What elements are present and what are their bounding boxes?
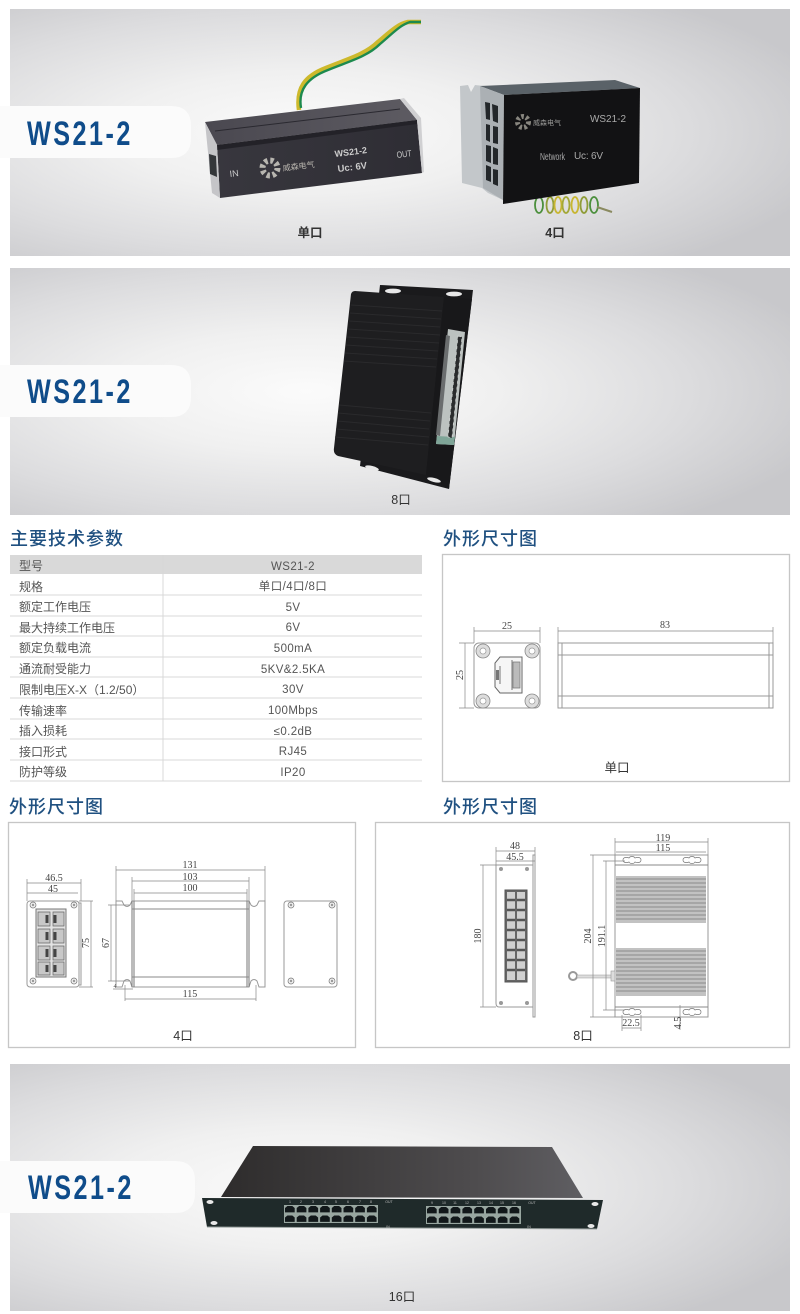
table row: specification: 单口/4口/8口 (259, 580, 327, 593)
table row: insertion loss: 插入损耗 (19, 724, 67, 738)
drawing: 4-port side view: 103 (182, 872, 198, 883)
heading: main technical parameters: 主要技术参数 (10, 529, 124, 549)
table row: rated working voltage: 5V (286, 602, 300, 614)
port labels: 16 (512, 1201, 516, 1205)
drawing: 8-port front view: 45.5 (506, 852, 524, 863)
drawing: 8-port top view: 4.5 (673, 1017, 684, 1029)
table row: rated load current: 500mA (274, 643, 312, 655)
label pill: WS21-2: WS21-2 (27, 373, 133, 411)
drawing: 4-port front view: 46.5 (45, 873, 63, 884)
table row: model: 型号 (19, 559, 43, 573)
product: 16-port rack surge protector (202, 1146, 603, 1229)
panel: 8-port dimension drawing (376, 822, 790, 1048)
drawing: 8-port top view: 119 (656, 833, 670, 844)
drawing: 8-port front view: 48 (510, 841, 520, 852)
table row: insertion loss (19, 724, 312, 738)
port labels: 4 (324, 1200, 326, 1204)
port labels: IN (386, 1225, 390, 1229)
caption: 16 ports: 16口 (389, 1290, 415, 1304)
drawing: front view: 25 (502, 621, 512, 632)
table row: model (19, 559, 315, 573)
drawing: 8-port top view (569, 833, 708, 1031)
table row: protection class: 防护等级 (19, 764, 67, 779)
product: single port surge protector: IN (229, 168, 239, 179)
label pill: WS21-2: WS21-2 (27, 115, 133, 153)
caption: 8 ports: 8口 (391, 493, 411, 507)
drawing: 4-port front view: 45 (48, 884, 58, 895)
ports: right block (426, 1206, 521, 1224)
drawing: front view: 25 (455, 670, 466, 680)
port labels: 1 (289, 1200, 291, 1204)
banner: 16-port product (0, 1064, 790, 1311)
banner: 8-port product (0, 268, 790, 515)
drawing: side view: 83 (660, 620, 670, 631)
table row: surge capacity (19, 662, 325, 676)
port labels: 3 (312, 1200, 314, 1204)
product: 4-port surge protector (460, 80, 640, 213)
caption: single port: 单口 (297, 225, 323, 240)
panel: 4-port dimension drawing (8, 822, 356, 1048)
product: 4-port surge protector: WS21-2 (590, 114, 626, 125)
port labels: 2 (300, 1200, 302, 1204)
port labels: IN (527, 1225, 531, 1229)
drawing: 4-port side view (101, 860, 265, 1001)
table row: transmission rate: 100Mbps (268, 705, 318, 717)
table row: specification: 规格 (19, 579, 43, 594)
drawing: 8-port top view: 115 (656, 843, 670, 854)
product: single port surge protector: WS21-2 (334, 145, 368, 159)
drawing: side view (558, 620, 773, 708)
port labels: 8 (370, 1200, 372, 1204)
table row: clamping voltage (19, 683, 304, 697)
drawing: 4-port side view: 131 (182, 860, 198, 871)
table row: transmission rate (19, 703, 318, 718)
port labels (289, 1200, 537, 1229)
table row: protection class: IP20 (280, 767, 306, 779)
table row: model: WS21-2 (271, 561, 315, 573)
table row: surge capacity: 通流耐受能力 (19, 662, 91, 676)
label pill: WS21-2 (0, 106, 191, 158)
drawing: front view (455, 621, 540, 708)
caption: 8 ports: 8口 (573, 1029, 593, 1043)
port labels: 14 (489, 1201, 493, 1205)
table row: max continuous voltage (19, 620, 300, 635)
table row: rated load current: 额定负载电流 (19, 640, 91, 655)
port labels: 12 (465, 1201, 469, 1205)
table row: surge capacity: 5KV&2.5KA (261, 664, 325, 676)
drawing: 8-port top view: 204 (583, 928, 594, 944)
label pill: WS21-2 (0, 1161, 195, 1213)
product: single port surge protector: 威森电气 (282, 159, 315, 173)
drawing: 4-port side view: 115 (183, 989, 197, 1000)
port labels: OUT (385, 1200, 394, 1204)
product: single port surge protector: OUT (396, 148, 413, 160)
port labels: 7 (359, 1200, 361, 1204)
table row: rated working voltage (19, 599, 300, 614)
product: 4-port surge protector: 威森电气 (533, 118, 561, 127)
drawing: 8-port top view: 22.5 (622, 1018, 640, 1029)
table row: specification (19, 579, 327, 594)
drawing: 4-port rear view (284, 901, 337, 987)
table row: clamping voltage: 限制电压X-X（1.2/50） (19, 683, 144, 697)
panel: single-port dimension drawing (442, 554, 790, 782)
product: 4-port surge protector: Uc: 6V (574, 151, 603, 162)
table row: rated load current (19, 640, 312, 655)
table: technical parameters (10, 555, 422, 781)
product: 4-port surge protector: Network (540, 152, 566, 163)
drawing: 4-port front view (27, 873, 93, 987)
drawing: 8-port front view: 180 (473, 928, 484, 944)
port labels: 15 (500, 1201, 504, 1205)
port labels: 6 (347, 1200, 349, 1204)
table row: max continuous voltage: 最大持续工作电压 (19, 620, 115, 635)
caption: single port: 单口 (604, 761, 630, 775)
table row: interface (19, 744, 307, 759)
product: single port surge protector: Uc: 6V (337, 160, 368, 175)
drawing: 8-port top view: 191.1 (597, 925, 608, 947)
banner: single and 4-port products (0, 9, 790, 256)
caption: 4 ports: 4口 (545, 226, 565, 240)
ports: left block (284, 1205, 378, 1223)
table row: protection class (19, 764, 306, 779)
port labels: OUT (528, 1201, 537, 1205)
port labels: 13 (477, 1201, 481, 1205)
port labels: 11 (453, 1201, 457, 1205)
drawing: 4-port side view: 4 (114, 984, 116, 990)
drawing: 4-port front view: 75 (81, 938, 92, 948)
table row: rated working voltage: 额定工作电压 (19, 599, 91, 614)
table row: interface: RJ45 (279, 746, 307, 758)
heading: dimensions 4-port: 外形尺寸图 (9, 797, 104, 817)
label pill: WS21-2 (0, 365, 191, 417)
product: single port surge protector (205, 22, 424, 198)
caption: 4 ports: 4口 (173, 1029, 193, 1043)
table row: insertion loss: ≤0.2dB (274, 726, 312, 738)
table row: interface: 接口形式 (19, 744, 67, 759)
heading: dimensions 8-port: 外形尺寸图 (443, 797, 538, 817)
heading: dimensions single: 外形尺寸图 (443, 529, 538, 549)
label pill: WS21-2: WS21-2 (28, 1169, 134, 1207)
drawing: 4-port side view: 100 (182, 883, 198, 894)
drawing: 4-port side view: 67 (101, 938, 112, 948)
product: 8-port surge protector (334, 285, 473, 489)
table row: max continuous voltage: 6V (286, 622, 300, 634)
port labels: 9 (431, 1201, 433, 1205)
table row: clamping voltage: 30V (282, 684, 304, 696)
drawing: 8-port front view (473, 841, 535, 1017)
table row: transmission rate: 传输速率 (19, 703, 67, 718)
port labels: 5 (335, 1200, 337, 1204)
port labels: 10 (442, 1201, 446, 1205)
